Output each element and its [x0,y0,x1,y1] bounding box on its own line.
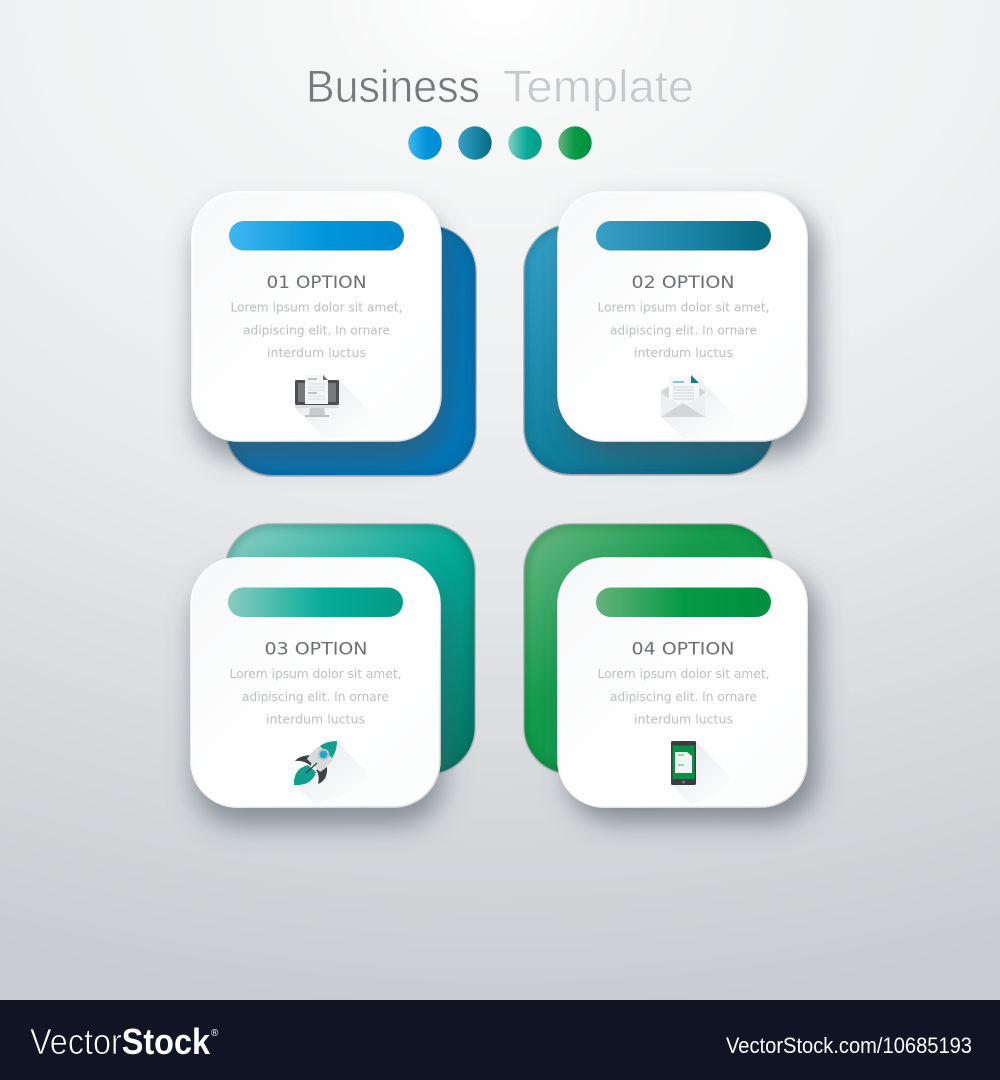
text 02: interdum luctus [634,345,733,360]
text 04: Lorem ipsum dolor sit amet, [598,666,770,681]
heading 04: 04 OPTION [632,640,734,660]
text 03 [230,666,402,726]
heading 02: 02 OPTION [632,273,734,293]
title [306,61,694,112]
text 03: adipiscing elit. In ornare [242,689,389,704]
bar 03 [228,588,403,617]
title: Template [503,61,694,112]
panel: option 02 [523,192,807,476]
text 04: interdum luctus [634,712,733,726]
text 01: Lorem ipsum dolor sit amet, [230,300,402,314]
icon: smartphone [671,741,732,805]
text 04: adipiscing elit. In ornare [610,689,757,704]
bar 04 [596,588,771,617]
text 01: interdum luctus [267,345,366,360]
title: Business [306,61,480,112]
back square 01 [225,225,477,477]
heading 03: 03 OPTION [264,640,368,660]
panel: option 04 [523,523,807,807]
text 04 [598,666,770,726]
icon: rocket [294,741,368,805]
text 02 [598,300,770,360]
card 02 [558,192,807,441]
icon: envelope [661,375,734,439]
text 02: adipiscing elit. In ornare [610,322,757,338]
card 03 [191,558,440,807]
text 03: interdum luctus [266,712,365,726]
back square 03 [224,523,476,775]
color dots [408,126,592,160]
back square 02 [523,224,775,476]
footer logo: VectorStock [30,1021,211,1062]
text 01: adipiscing elit. In ornare [243,322,390,338]
panel: option 03 [191,523,476,807]
icon: computer document [295,375,368,439]
text 01 [230,300,402,360]
heading 01: 01 OPTION [266,273,366,293]
back square 04 [523,523,775,775]
bar 01 [229,221,404,250]
text 02: Lorem ipsum dolor sit amet, [598,300,770,314]
bar 02 [596,221,771,250]
panel: option 01 [192,192,477,477]
footer url: VectorStock.com/10685193 [726,1033,972,1058]
card 01 [192,192,441,441]
card 04 [558,558,807,807]
registered mark: ® [211,1028,219,1039]
footer bar [0,1000,1000,1080]
text 03: Lorem ipsum dolor sit amet, [230,666,402,681]
